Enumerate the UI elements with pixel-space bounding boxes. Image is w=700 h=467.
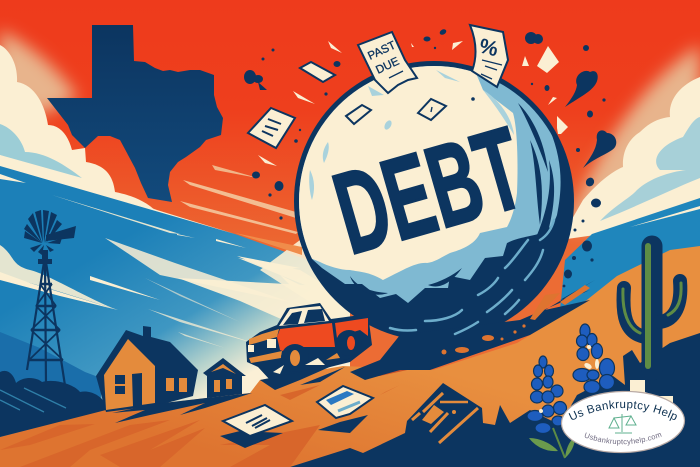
stems and leaves <box>553 428 565 458</box>
windmill wheel <box>24 210 76 264</box>
ball cream face <box>299 66 518 280</box>
small shards on ball <box>346 99 446 124</box>
right cloud <box>560 77 700 240</box>
percent paper: % <box>477 35 501 61</box>
ground document <box>220 405 292 448</box>
past due paper: DUE <box>374 55 402 77</box>
ball blue band <box>299 66 561 303</box>
cream map fragment behind logo <box>630 380 673 410</box>
orange wind streaks <box>180 165 302 255</box>
past due paper: PAST <box>366 40 398 63</box>
logo badge <box>560 390 686 454</box>
ground texture <box>0 325 600 467</box>
pickup truck <box>246 303 372 390</box>
flying paper scraps left <box>258 41 342 166</box>
mountain <box>0 332 101 430</box>
DEBT lettering: DEBT <box>321 102 537 279</box>
left cloud <box>0 45 157 212</box>
sky wind streaks <box>0 155 350 348</box>
torn card icon <box>412 393 478 443</box>
percent paper <box>470 25 508 87</box>
ball blue accents <box>309 70 514 200</box>
ground <box>0 246 700 467</box>
Texas silhouette <box>47 25 223 202</box>
logo url: Usbankruptcyhelp.com <box>584 432 662 446</box>
debris: right of the ball <box>424 28 616 287</box>
orange chips on debris trail <box>442 285 590 354</box>
large house <box>96 326 198 412</box>
blue sky band <box>0 165 350 440</box>
haze behind clouds <box>0 30 700 230</box>
small house <box>203 358 246 398</box>
debt snowball <box>294 61 593 380</box>
debris: left of the ball <box>244 48 340 220</box>
cloud stripe <box>630 206 700 227</box>
debris trail under ball <box>350 280 595 380</box>
windmill <box>24 210 76 392</box>
bluebonnet flowers <box>527 324 614 458</box>
tree highlights <box>0 388 66 412</box>
cactus <box>623 246 681 370</box>
tree line <box>0 371 106 437</box>
foreground navy ground <box>290 333 700 467</box>
flying document left <box>248 108 295 148</box>
ground card <box>317 386 373 433</box>
house shadows <box>112 393 252 423</box>
ball dark outer <box>294 61 574 341</box>
scales icon <box>609 414 636 433</box>
ball navy streaks on band <box>350 103 554 295</box>
right blue sky <box>560 198 700 310</box>
flying paper scraps right <box>411 41 568 134</box>
ball lower streaks <box>390 220 554 334</box>
logo title: Us Bankruptcy Help <box>568 400 677 421</box>
past due paper <box>358 32 417 93</box>
